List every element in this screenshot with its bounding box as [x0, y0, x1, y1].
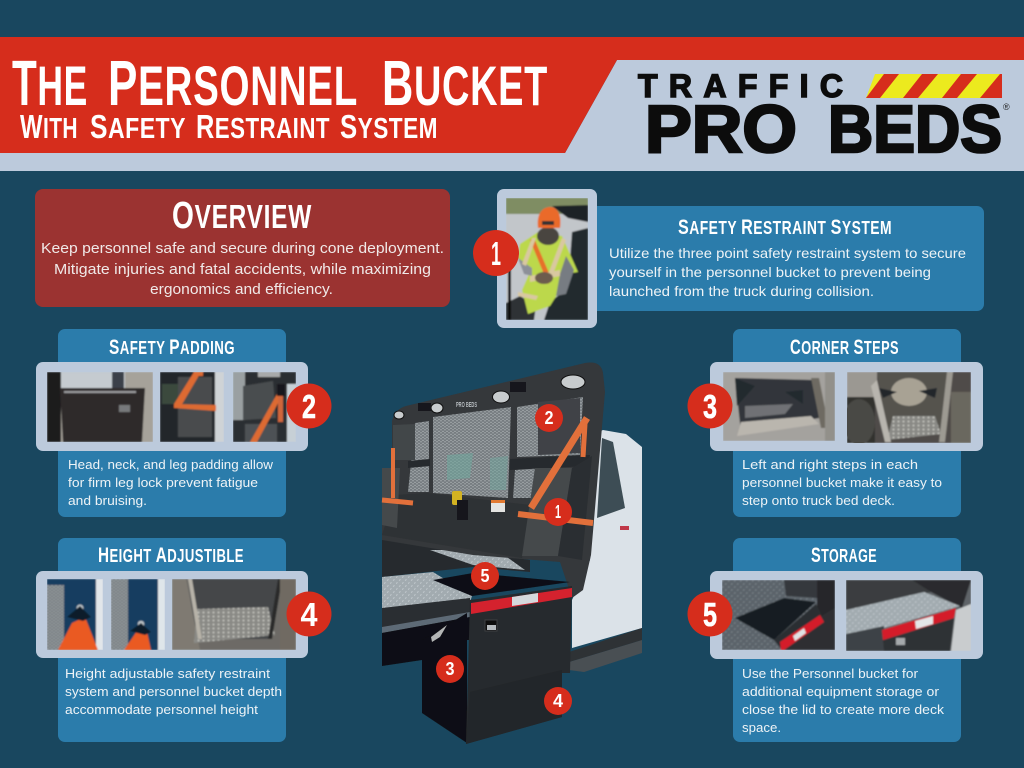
overview text: ergonomics and efficiency. — [150, 281, 333, 298]
marker 4: 4 — [553, 691, 563, 711]
photo: bucket depth — [172, 579, 296, 650]
marker 1 — [544, 498, 572, 526]
subtitle: SYSTEM — [340, 108, 438, 145]
subtitle: SAFETY — [90, 108, 186, 145]
badge 5: 5 — [703, 596, 717, 633]
panel: safety padding — [36, 329, 308, 517]
marker 2: 2 — [544, 408, 554, 428]
photo frame: worker — [497, 189, 597, 328]
logo registered mark: ® — [1003, 102, 1010, 112]
marker 5: 5 — [480, 566, 490, 586]
heading: corner steps: CORNER STEPS — [790, 336, 899, 359]
crossbars — [408, 459, 430, 468]
central truck photo illustration — [382, 362, 642, 744]
body: height adjustible: accommodate personnel height — [65, 702, 258, 717]
title: BUCKET — [382, 47, 548, 119]
body: storage — [742, 666, 944, 735]
body: storage: close the lid to create more deck — [742, 702, 944, 717]
heading: storage: STORAGE — [811, 544, 877, 567]
frame: storage photos — [710, 571, 983, 659]
panel: storage — [710, 538, 983, 742]
bucket handle — [485, 620, 497, 631]
panel: overview — [35, 189, 450, 307]
mesh windows — [433, 407, 511, 498]
photo: height strap high — [47, 579, 103, 650]
overview heading: OVERVIEW — [172, 195, 312, 237]
marker 2 — [535, 404, 563, 432]
padding — [538, 398, 580, 455]
lights — [561, 375, 585, 389]
yellow device and sticker — [452, 491, 462, 505]
title — [12, 47, 548, 119]
overview text: Keep personnel safe and secure during cone deployment. — [41, 240, 444, 257]
body: storage: space. — [742, 720, 781, 735]
subtitle: RESTRAINT — [196, 108, 330, 145]
orange straps — [382, 418, 593, 523]
headboard — [382, 362, 605, 598]
truck cab — [572, 430, 642, 648]
heading: height adjustible: HEIGHT ADJUSTIBLE — [98, 544, 244, 567]
panel: height adjustible — [36, 538, 308, 742]
subtitle: WITH — [20, 108, 78, 145]
body: storage: additional equipment storage or — [742, 684, 940, 699]
body: safety restraint system: launched from the truck during collision. — [609, 283, 874, 299]
body: corner steps: step onto truck bed deck. — [742, 493, 895, 508]
marker 4 — [544, 687, 572, 715]
frame: corner steps photos — [710, 362, 983, 451]
photo: padding 1 — [47, 372, 153, 442]
body: storage: Use the Personnel bucket for — [742, 666, 919, 681]
badge 3: 3 — [703, 388, 717, 425]
body: safety padding: and bruising. — [68, 493, 147, 508]
photo: lid open — [722, 580, 835, 650]
photo: lid closed — [846, 580, 971, 651]
panel: safety restraint system — [590, 206, 984, 311]
photo: steps from rear — [847, 372, 971, 443]
header banner — [0, 37, 1024, 171]
badge 1 — [473, 230, 519, 276]
board logo: PRO BEDS — [456, 402, 477, 409]
panel: corner steps — [710, 329, 983, 517]
deck — [382, 538, 530, 577]
subtitle — [20, 108, 438, 145]
logo: Traffic Pro Beds — [638, 68, 1010, 167]
under deck beam — [382, 598, 470, 635]
photo: padding 3 — [233, 372, 296, 442]
bucket front — [466, 586, 572, 744]
photo: steps from above — [723, 372, 835, 441]
body: safety restraint system — [609, 245, 966, 299]
overview text — [41, 240, 444, 298]
overview text: Mitigate injuries and fatal accidents, while maximizing — [54, 261, 431, 278]
body: height adjustible: Height adjustable safety restraint — [65, 666, 270, 681]
badge 3 — [688, 384, 732, 428]
heading: safety padding: SAFETY PADDING — [109, 336, 235, 359]
header gray band — [0, 60, 1024, 171]
bucket opening — [433, 573, 570, 596]
marker 1: 1 — [555, 502, 561, 522]
heading: safety restraint system: SAFETY RESTRAINT SYSTEM — [678, 216, 892, 239]
body: safety restraint system: yourself in the personnel bucket to prevent being — [609, 264, 931, 280]
badge 4 — [286, 592, 332, 636]
logo word: TRAFFIC: TRAFFIC — [638, 68, 843, 104]
badge 4: 4 — [300, 596, 318, 633]
body: safety padding: for firm leg lock prevent fatigue — [68, 475, 258, 490]
body: safety restraint system: Utilize the three point safety restraint system to secure — [609, 245, 966, 261]
frame: height photos — [36, 571, 308, 658]
marker 3: 3 — [446, 659, 454, 679]
logo word: PRO BEDS: PRO — [645, 92, 797, 167]
title: THE — [12, 47, 88, 119]
photo: height strap low — [111, 579, 165, 650]
logo word: PRO BEDS — [645, 92, 1002, 167]
frame: padding photos — [36, 362, 308, 451]
body: corner steps: Left and right steps in each — [742, 457, 918, 472]
logo hazard stripes — [866, 74, 1002, 98]
photo: worker in restraint — [506, 198, 588, 320]
body: height adjustible: system and personnel bucket depth — [65, 684, 282, 699]
body: safety padding — [68, 457, 273, 508]
title: PERSONNEL — [108, 47, 358, 119]
badge 5 — [688, 592, 732, 636]
marker 3 — [436, 655, 464, 683]
logo word: PRO BEDS: BEDS — [828, 92, 1002, 167]
body: corner steps — [742, 457, 942, 508]
lower board — [382, 493, 530, 558]
badge 2: 2 — [302, 388, 316, 425]
badge 2 — [286, 384, 332, 428]
marker 5 — [471, 562, 499, 590]
header red band — [0, 37, 1024, 153]
reflective stripe — [471, 588, 572, 614]
badge 1: 1 — [491, 235, 501, 272]
body: height adjustible — [65, 666, 282, 717]
bucket side — [422, 613, 467, 743]
body: safety padding: Head, neck, and leg padding allow — [68, 457, 273, 472]
photo: padding 2 — [160, 372, 224, 442]
body: corner steps: personnel bucket make it easy to — [742, 475, 942, 490]
